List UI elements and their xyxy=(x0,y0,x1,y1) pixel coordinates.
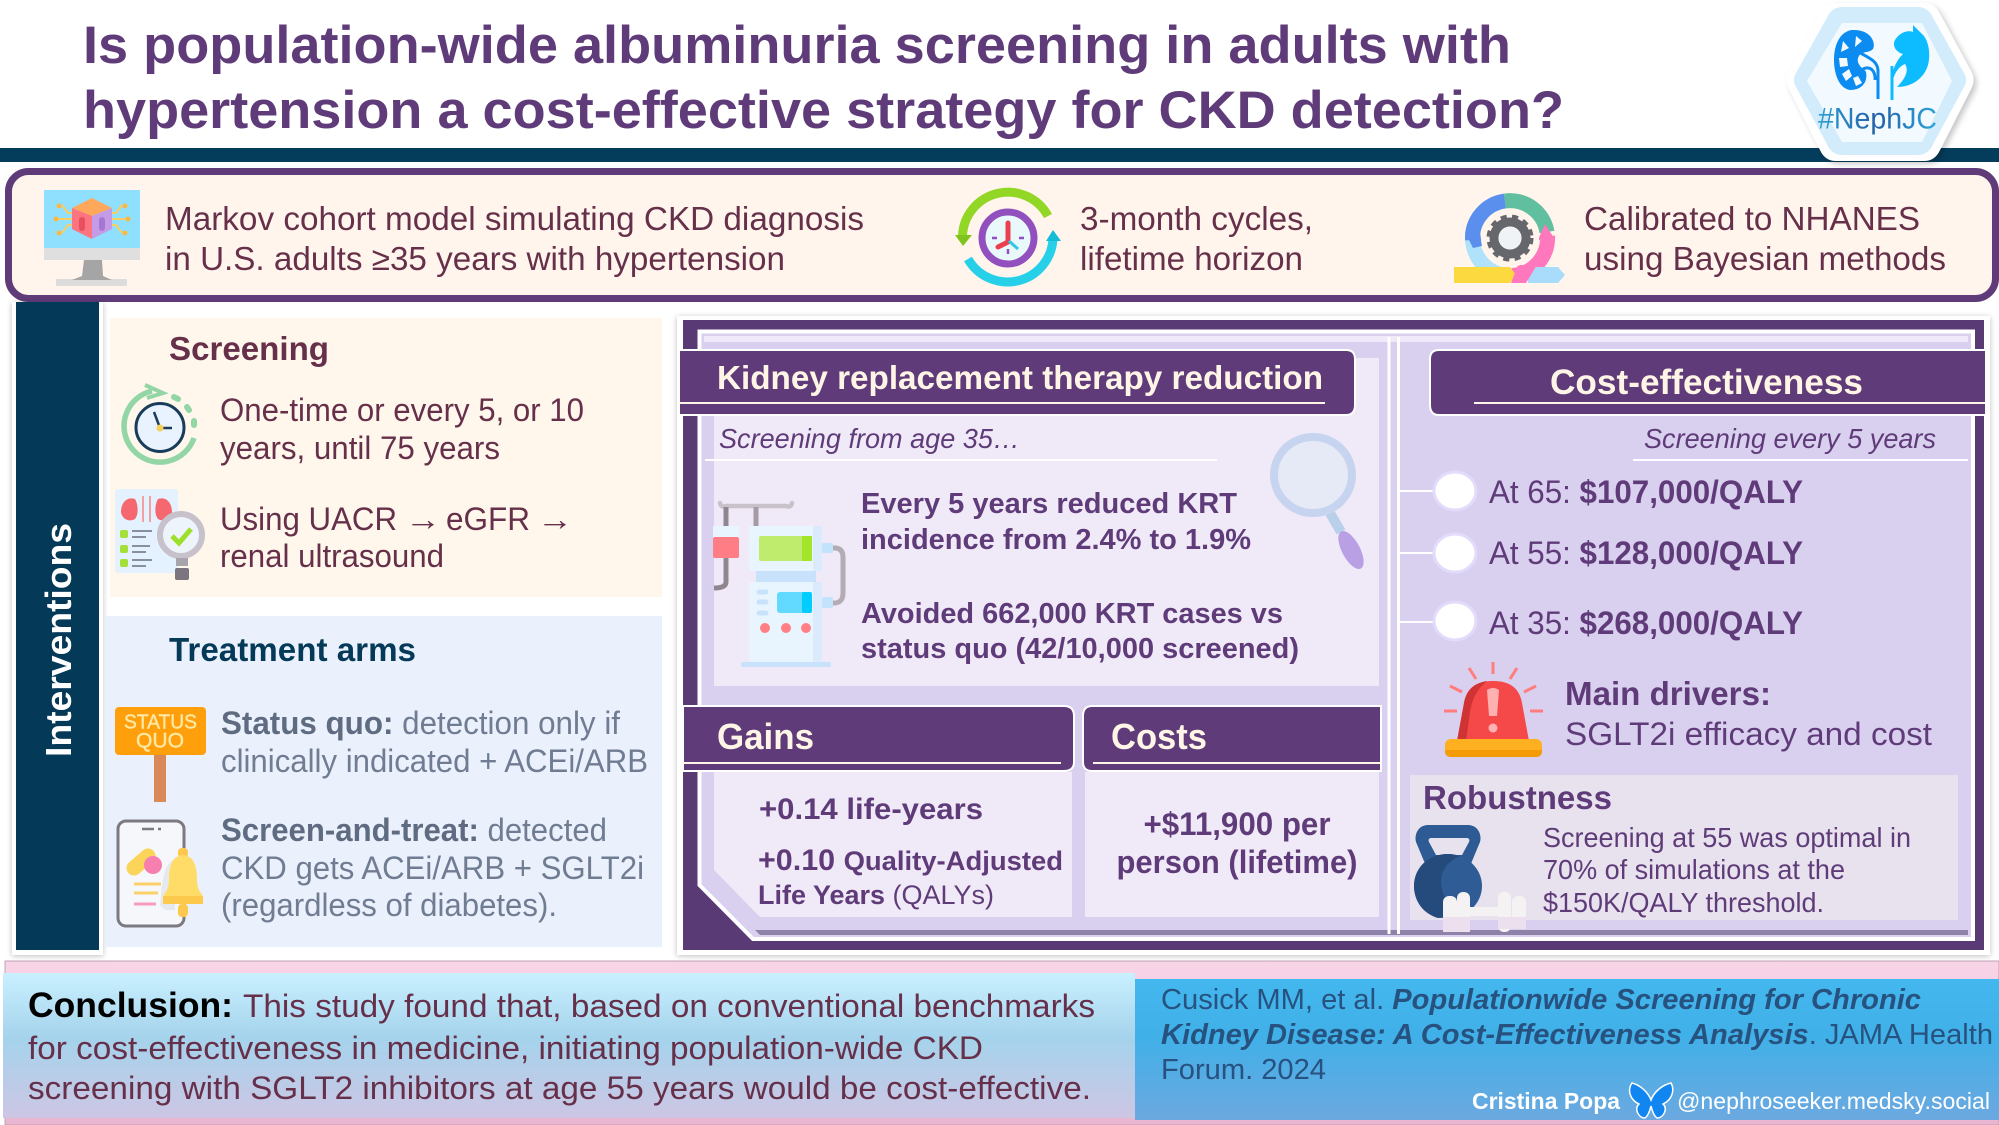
text: screening tests xyxy=(220,501,573,574)
text: status quo: clinically indicated + ACEi/ARB xyxy=(221,743,648,779)
text: calibration: using Bayesian methods xyxy=(1584,240,1946,277)
text: robustness result xyxy=(1543,822,1911,918)
text: model description xyxy=(165,200,864,277)
heading: gains: Gains xyxy=(717,716,814,757)
panel: screening xyxy=(110,318,662,597)
panel: citation xyxy=(1135,979,1999,1120)
heading: KRT reduction: Kidney replacement therapy reduction xyxy=(717,360,1323,397)
text: incidence xyxy=(861,488,1251,556)
panel: conclusion: screening with SGLT2 inhibitors at age 55 years would be cost-effective. xyxy=(28,1070,1091,1106)
subheading: from age 35: Screening from age 35… xyxy=(719,423,1020,454)
row: age 65: At 65: $107,000/QALY xyxy=(1489,474,1803,510)
icon: kidney report xyxy=(115,489,202,580)
text: life-years gained xyxy=(758,793,1063,910)
panel: citation: Kidney Disease: A Cost-Effectiveness Analysis. JAMA Health xyxy=(1161,1019,1993,1051)
text: lifetime cost xyxy=(1116,806,1358,880)
panel: conclusion xyxy=(3,973,1135,1118)
panel: conclusion: Conclusion: xyxy=(28,986,233,1025)
text: calibration xyxy=(1584,200,1946,277)
text: lifetime cost: +$11,900 per xyxy=(1144,806,1330,842)
text: screen and treat: (regardless of diabetes). xyxy=(221,887,557,923)
text: model description: Markov cohort model simulating CKD diagnosis xyxy=(165,200,864,237)
heading: screening: Screening xyxy=(169,330,329,367)
text: cycles xyxy=(1080,200,1313,277)
icon: calibration gear xyxy=(1454,201,1565,283)
row: age 35: At 35: $268,000/QALY xyxy=(1489,605,1803,641)
panel: interventions sidebar: Interventions xyxy=(38,523,79,757)
text: main drivers xyxy=(1565,675,1932,752)
heading: costs: Costs xyxy=(1111,716,1207,757)
pink band xyxy=(5,961,1999,1125)
divider xyxy=(1389,337,1398,934)
text: life-years gained: Life Years (QALYs) xyxy=(758,880,994,910)
panel: citation: Cusick MM, et al. Populationwide Screening for Chronic xyxy=(1161,984,1921,1016)
title: Is population-wide albuminuria screening in adults with xyxy=(83,16,1511,75)
icon: phone and bell xyxy=(118,821,203,926)
icon: alarm light xyxy=(1444,662,1543,757)
icon: butterfly xyxy=(1630,1083,1673,1118)
text: screening tests: → xyxy=(537,501,573,537)
icon: dialysis machine xyxy=(713,503,843,667)
text: incidence: Every 5 years reduced KRT xyxy=(861,488,1237,520)
icon: kettlebell and dumbbell xyxy=(1414,825,1526,932)
text: screening tests: → xyxy=(405,501,441,537)
heading: cost-effectiveness: Cost-effectiveness xyxy=(1550,363,1863,402)
icon: computer model xyxy=(44,190,140,286)
text: life-years gained: +0.10 Quality-Adjusted xyxy=(758,844,1063,877)
text: screening tests: eGFR xyxy=(446,501,530,537)
text: robustness result: Screening at 55 was optimal in xyxy=(1543,822,1911,853)
panel: outcomes frame xyxy=(677,316,1990,955)
panel: costs xyxy=(1083,706,1381,917)
header bar xyxy=(0,148,1999,162)
text: main drivers: Main drivers: xyxy=(1565,675,1771,712)
panel: citation: Forum. 2024 xyxy=(1161,1054,1326,1086)
text: cycles: lifetime horizon xyxy=(1080,240,1303,277)
text: screening tests: renal ultrasound xyxy=(220,538,444,574)
text: screening schedule: years, until 75 years xyxy=(220,430,500,466)
text: robustness result: $150K/QALY threshold. xyxy=(1543,887,1824,918)
text: avoided cases: Avoided 662,000 KRT cases vs xyxy=(861,598,1283,630)
text: screening schedule xyxy=(220,392,584,466)
heading: gains xyxy=(683,706,1074,771)
text: screen and treat: Screen-and-treat: detected xyxy=(221,812,607,848)
panel: conclusion: This study found that, based on conventional benchmarks xyxy=(243,988,1095,1024)
text: screening tests: Using UACR xyxy=(220,501,397,537)
panel: treatment arms xyxy=(105,616,662,947)
text: screening schedule: One-time or every 5, or 10 xyxy=(220,392,584,428)
panel: robustness xyxy=(1410,775,1958,932)
text: cycles: 3-month cycles, xyxy=(1080,200,1313,237)
heading: costs xyxy=(1083,706,1381,771)
panel: gains xyxy=(683,706,1074,917)
icon: stopwatch xyxy=(124,385,194,462)
text: avoided cases: status quo (42/10,000 screened) xyxy=(861,633,1299,665)
icon: status quo sign: STATUS xyxy=(124,712,197,734)
text: screen and treat: CKD gets ACEi/ARB + SGLT2i xyxy=(221,850,644,886)
panel: study design xyxy=(8,172,1996,298)
panel: cost-effectiveness xyxy=(1400,350,1986,932)
text: status quo: Status quo: detection only if xyxy=(221,705,620,741)
icon: magnifying glass xyxy=(1274,437,1369,573)
text: main drivers: SGLT2i efficacy and cost xyxy=(1565,716,1932,752)
text: incidence: incidence from 2.4% to 1.9% xyxy=(861,524,1251,556)
icon: NephJC logo xyxy=(1786,3,1974,161)
panel: KRT reduction xyxy=(679,350,1379,686)
text: lifetime cost: person (lifetime) xyxy=(1116,844,1358,880)
icon: status quo sign xyxy=(115,707,206,802)
text: avoided cases xyxy=(861,598,1299,665)
panel: conclusion: for cost-effectiveness in medicine, initiating population-wide CKD xyxy=(28,1030,983,1066)
heading: robustness: Robustness xyxy=(1423,779,1612,816)
icon: status quo sign: QUO xyxy=(136,730,184,752)
text: screen and treat xyxy=(221,812,644,923)
title: hypertension a cost-effective strategy for CKD detection? xyxy=(83,81,1564,140)
heading: treatment arms: Treatment arms xyxy=(169,631,416,668)
text: status quo xyxy=(221,705,648,779)
subheading: every 5 years: Screening every 5 years xyxy=(1644,423,1936,454)
author credit xyxy=(1472,1083,1990,1118)
heading: KRT reduction xyxy=(679,350,1355,415)
title xyxy=(83,16,1564,140)
panel: interventions sidebar xyxy=(12,302,103,955)
text: model description: in U.S. adults ≥35 years with hypertension xyxy=(165,240,785,277)
icon: NephJC logo: #NephJC xyxy=(1818,102,1937,136)
text: calibration: Calibrated to NHANES xyxy=(1584,200,1920,237)
author credit: Cristina Popa xyxy=(1472,1088,1620,1114)
text: life-years gained: +0.14 life-years xyxy=(759,793,983,826)
icon: cycle clock xyxy=(955,192,1061,282)
row: age 55: At 55: $128,000/QALY xyxy=(1489,535,1803,571)
text: robustness result: 70% of simulations at the xyxy=(1543,854,1845,885)
heading: cost-effectiveness xyxy=(1430,350,1986,415)
author credit: @nephroseeker.medsky.social xyxy=(1677,1088,1990,1114)
